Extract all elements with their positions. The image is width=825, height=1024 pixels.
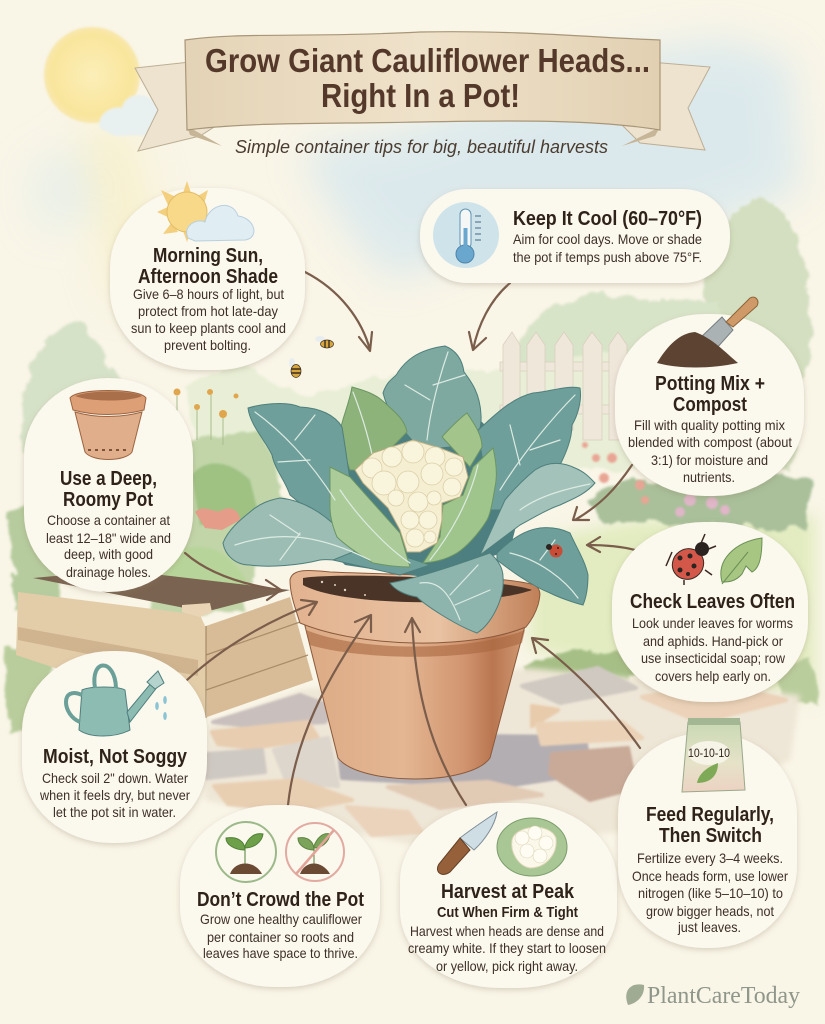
ladybug on leaf — [546, 544, 562, 558]
arrow: feed to pot — [532, 638, 640, 748]
panel: don't crowd: per container so roots and — [207, 929, 354, 945]
arrow: moist to pot — [187, 600, 317, 680]
arrow: potting mix to soil — [573, 465, 632, 520]
panel: check leaves: Check Leaves Often — [630, 591, 795, 613]
icon: thermometer — [433, 202, 499, 268]
fence — [500, 332, 635, 440]
panel: potting mix: Potting Mix + — [655, 373, 765, 395]
panel: feed regularly: nitrogen (like 5–10–10) to — [638, 885, 783, 901]
background trees — [21, 198, 810, 480]
icon: chewed leaf — [721, 538, 762, 584]
panel: moist not soggy: Moist, Not Soggy — [43, 746, 188, 768]
panel: check leaves: Look under leaves for worms — [632, 615, 793, 631]
panel: feed regularly: Once heads form, use lower — [632, 868, 788, 884]
panel: potting mix: nutrients. — [683, 469, 735, 485]
terracotta pot — [290, 570, 540, 779]
panel: moist not soggy: let the pot sit in water. — [53, 804, 176, 820]
title banner — [135, 32, 710, 151]
raised garden bed — [16, 570, 313, 718]
heading: Grow Giant Cauliflower Heads — [205, 42, 650, 114]
panel: harvest at peak: creamy white. If they start to loosen — [408, 940, 606, 956]
icon: terracotta pot — [70, 390, 146, 460]
central cauliflower plant in pot — [223, 346, 595, 779]
panel: morning sun: Give 6–8 hours of light, but — [133, 286, 284, 302]
panel: keep it cool: Keep It Cool (60–70°F) — [513, 208, 702, 230]
sun and cloud — [44, 27, 160, 136]
heading: Grow Giant Cauliflower Heads: Right In a Pot! — [321, 77, 520, 114]
panel: keep it cool: the pot if temps push above 75°F. — [513, 249, 702, 265]
panel: deep pot — [24, 378, 193, 592]
panel: deep pot: Choose a container at — [47, 512, 170, 528]
arrow: morning sun to plant — [305, 272, 372, 351]
arrow: check leaves to leaf — [587, 537, 635, 552]
arrow: crowd to pot — [288, 615, 371, 805]
panel: don't crowd: Grow one healthy cauliflower — [200, 911, 362, 927]
cauliflower head — [355, 440, 468, 552]
panel: potting mix: 3:1) for moisture and — [651, 452, 768, 468]
icon: knife — [437, 812, 497, 874]
panel: keep it cool — [420, 189, 730, 283]
icon: watering can — [66, 666, 167, 736]
panel: harvest at peak: Harvest when heads are dense and — [410, 923, 604, 939]
panel: check leaves: covers help early on. — [655, 668, 771, 684]
icon: ladybug — [666, 534, 716, 585]
panel: moist not soggy — [22, 651, 207, 843]
panel: morning sun: Morning Sun, — [153, 245, 263, 267]
icon: sun and cloud — [157, 181, 254, 242]
leaf veins — [235, 352, 590, 620]
panel: potting mix: Compost — [673, 394, 747, 416]
panel: harvest at peak — [400, 803, 617, 988]
panel: harvest at peak: or yellow, pick right away. — [436, 958, 578, 974]
icon: cauliflower — [497, 818, 567, 876]
panel: deep pot: deep, with good — [64, 546, 153, 562]
panel: check leaves: use insecticidal soap; row — [641, 650, 786, 666]
panel: deep pot: Use a Deep, — [60, 468, 157, 490]
bee — [315, 336, 334, 348]
panel: morning sun: Afternoon Shade — [138, 266, 278, 288]
icon: fertilizer bag — [682, 718, 745, 792]
panel: don't crowd: leaves have space to thrive. — [203, 945, 358, 961]
bee — [289, 358, 301, 378]
leaves — [223, 346, 595, 633]
panel: morning sun — [110, 181, 305, 370]
arrow: harvest to pot — [405, 618, 466, 805]
panel: potting mix: Fill with quality potting mix — [634, 417, 785, 433]
heading: Grow Giant Cauliflower Heads: Grow Giant Cauliflower Heads... — [205, 42, 650, 79]
sky wash — [30, 40, 800, 300]
panel: feed regularly: Then Switch — [659, 825, 762, 847]
panel: deep pot: least 12–18" wide and — [46, 530, 171, 546]
garden lawn and shrubs — [5, 388, 818, 730]
panel: morning sun: prevent bolting. — [164, 337, 251, 353]
icon: healthy seedling — [216, 822, 276, 882]
panel: deep pot: drainage holes. — [66, 564, 151, 580]
panel: harvest at peak: Harvest at Peak — [441, 881, 575, 903]
arrow: deep pot to pot — [185, 553, 281, 600]
panel: morning sun: sun to keep plants cool and — [131, 320, 286, 336]
arrow: keep cool to plant — [469, 283, 510, 350]
panel: feed regularly: Feed Regularly, — [646, 804, 774, 826]
panel: don't crowd: Don’t Crowd the Pot — [197, 889, 364, 911]
patio stones — [205, 668, 800, 848]
panel: potting mix — [615, 297, 804, 496]
panel: don't crowd — [180, 805, 380, 987]
icon: trowel and soil — [657, 297, 758, 368]
panel: feed regularly: grow bigger heads, not — [646, 903, 774, 919]
panel: feed regularly — [618, 718, 797, 948]
subtitle: Simple container tips for big, beautiful harvests — [235, 137, 608, 157]
icon: crossed out seedlings — [286, 823, 344, 881]
logo: PlantCareToday: PlantCareToday — [647, 983, 800, 1009]
panel: potting mix: blended with compost (about — [628, 434, 792, 450]
panel: check leaves: and aphids. Hand-pick or — [643, 633, 783, 649]
panel: morning sun: protect from hot late-day — [138, 303, 278, 319]
icon: fertilizer bag: 10-10-10 — [688, 746, 730, 760]
panel: feed regularly: Fertilize every 3–4 weeks. — [637, 850, 783, 866]
panel: moist not soggy: when it feels dry, but never — [39, 787, 190, 803]
panel: deep pot: Roomy Pot — [63, 489, 153, 511]
panel: harvest at peak: Cut When Firm & Tight — [437, 904, 578, 921]
panel: check leaves — [612, 522, 808, 702]
panel: keep it cool: Aim for cool days. Move or shade — [513, 231, 702, 247]
panel: feed regularly: just leaves. — [677, 919, 741, 935]
panel: moist not soggy: Check soil 2" down. Water — [42, 770, 188, 786]
